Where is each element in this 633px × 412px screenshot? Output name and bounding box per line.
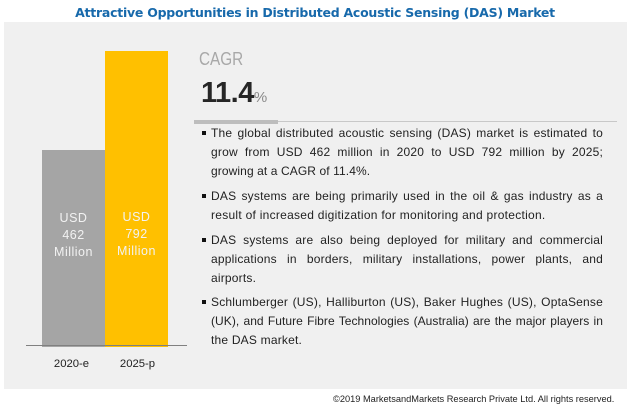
title: Attractive Opportunities in Distributed Acoustic Sensing (DAS) Market	[75, 5, 555, 20]
bullet 2: DAS systems are being primarily used in the oil & gas industry as a	[211, 189, 603, 203]
value label: 2025	[117, 210, 156, 258]
bar: 2020-e	[42, 150, 105, 347]
axis label: 2025-p: 2025-p	[120, 358, 155, 370]
bullet 1	[202, 126, 603, 178]
CAGR value: 11.4%	[201, 77, 267, 109]
value label: 2020: USD	[60, 211, 87, 225]
bullet 3: DAS systems are also being deployed for military and commercial	[211, 233, 603, 247]
bullet 4: Schlumberger (US), Halliburton (US), Baker Hughes (US), OptaSense	[211, 295, 603, 309]
bullet 2	[202, 189, 603, 222]
CAGR label: CAGR	[199, 49, 243, 69]
value label: 2025: USD	[123, 210, 150, 224]
axis label: 2020-e: 2020-e	[54, 358, 89, 370]
bar: 2025-p	[105, 51, 168, 347]
bullet 1: The global distributed acoustic sensing (DAS) market is estimated to	[211, 126, 603, 140]
bullet 4: the DAS market.	[211, 333, 302, 347]
value label: 2025: Million	[117, 244, 156, 258]
value label: 2020: 462	[62, 228, 85, 242]
bullet list	[202, 126, 603, 347]
value label: 2020	[54, 211, 93, 259]
bullet 2: result of increased digitization for monitoring and protection.	[211, 208, 546, 222]
bar chart	[26, 51, 187, 370]
bullet 4	[202, 295, 603, 347]
bullet 1: grow from USD 462 million in 2020 to USD 792 million by 2025;	[211, 145, 603, 159]
axis line	[26, 345, 187, 346]
separator	[194, 120, 617, 124]
bullet 3: applications in borders, military installations, power plants, and	[211, 252, 603, 266]
bullet 1: growing at a CAGR of 11.4%.	[211, 164, 370, 178]
bullet 3	[202, 233, 603, 285]
bullet 4: (UK), and Future Fibre Technologies (Australia) are the major players in	[211, 314, 603, 328]
bullet 3: airports.	[211, 271, 256, 285]
value label: 2020: Million	[54, 245, 93, 259]
value label: 2025: 792	[125, 227, 148, 241]
footer copyright: ©2019 MarketsandMarkets Research Private Ltd. All rights reserved.	[333, 394, 614, 404]
